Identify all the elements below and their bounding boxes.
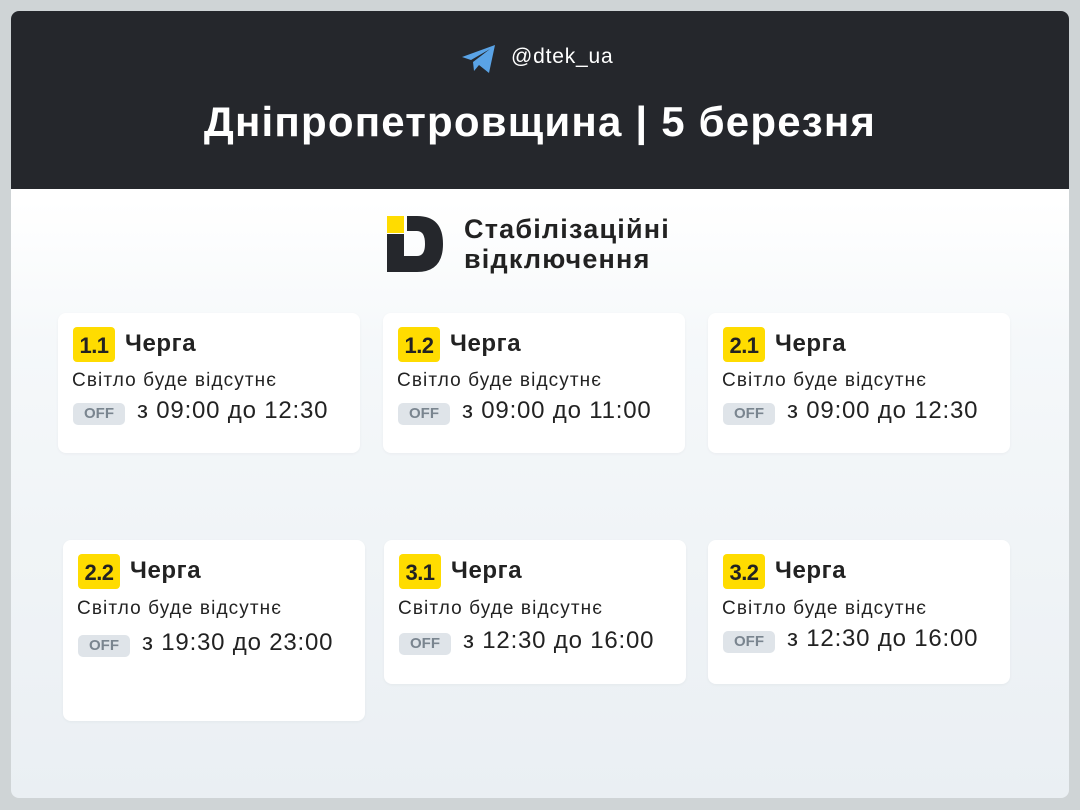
subtitle heading: Стабілізаційні [464, 214, 670, 244]
logo block [387, 214, 670, 274]
card 2.1: 2.1 [729, 333, 759, 358]
card 1.1 [58, 313, 360, 453]
card 2.1: Світло буде відсутнє [722, 370, 927, 391]
card 3.2 [708, 540, 1010, 684]
card 1.1: 1.1 [79, 333, 109, 358]
card 3.2: з 12:30 до 16:00 [787, 625, 978, 652]
card 3.2: Світло буде відсутнє [722, 598, 927, 619]
subtitle heading [464, 214, 670, 274]
card 3.1: Черга [451, 557, 522, 584]
title: Дніпропетровщина | 5 березня [204, 98, 876, 145]
card 3.1: OFF [410, 635, 440, 652]
card 1.1: Черга [125, 330, 196, 357]
card 1.2 [383, 313, 685, 453]
card 1.1: OFF [84, 405, 114, 422]
card 1.2: 1.2 [404, 333, 434, 358]
card 1.2: з 09:00 до 11:00 [462, 397, 652, 424]
card 3.2: OFF [734, 633, 764, 650]
handle: @dtek_ua [511, 45, 613, 68]
card 3.2: 3.2 [729, 560, 759, 585]
card 2.1 [708, 313, 1010, 453]
card 2.2: Черга [130, 557, 201, 584]
icon: telegram [462, 45, 495, 73]
card 1.1: Світло буде відсутнє [72, 370, 277, 391]
card 2.1: з 09:00 до 12:30 [787, 397, 978, 424]
card 2.1: OFF [734, 405, 764, 422]
card 2.2: з 19:30 до 23:00 [142, 629, 333, 656]
card 1.2: OFF [409, 405, 439, 422]
card 2.1: Черга [775, 330, 846, 357]
subtitle heading: відключення [464, 244, 651, 274]
card 2.2: Світло буде відсутнє [77, 598, 282, 619]
icon: DTEK logo [387, 216, 443, 272]
card 3.2: Черга [775, 557, 846, 584]
card 1.2: Черга [450, 330, 521, 357]
card 3.1: з 12:30 до 16:00 [463, 627, 654, 654]
card 3.1 [384, 540, 686, 684]
header [11, 11, 1069, 189]
card 3.1: Світло буде відсутнє [398, 598, 603, 619]
card 2.2: OFF [89, 637, 119, 654]
card 2.2: 2.2 [84, 560, 114, 585]
card 1.2: Світло буде відсутнє [397, 370, 602, 391]
card 2.2 [63, 540, 365, 721]
card 3.1: 3.1 [405, 560, 435, 585]
card 1.1: з 09:00 до 12:30 [137, 397, 328, 424]
